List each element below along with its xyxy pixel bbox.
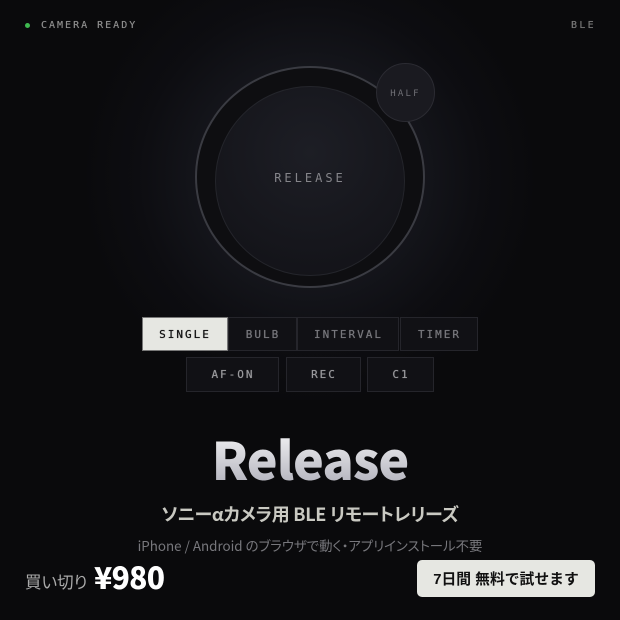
mode: REC: REC: [311, 368, 337, 381]
call to action button: [417, 560, 595, 597]
mode: TIMER: TIMER: [418, 328, 461, 340]
BLE label: BLE: [571, 20, 596, 31]
outer ring: [195, 66, 425, 288]
mode: BULB: BULB: [246, 328, 280, 340]
description: iPhone / Android のブラウザで動く・アプリインストール不要: [138, 535, 482, 555]
status text: CAMERA READY: [41, 20, 137, 31]
release dial: [195, 63, 435, 288]
call to action button: 7日間 無料で試せます: [433, 572, 579, 588]
mode: INTERVAL: [297, 317, 399, 351]
release label: RELEASE: [274, 171, 346, 185]
status indicator: camera ready: [25, 20, 137, 31]
mode: AF-ON: AF-ON: [211, 368, 255, 381]
mode: TIMER: [400, 317, 478, 351]
title: Release: [212, 420, 408, 495]
icon: green status dot: [25, 23, 30, 28]
price value: ¥980: [94, 554, 164, 598]
half press button: [376, 63, 435, 122]
price label: 買い切り: [25, 569, 87, 593]
mode: C1: [367, 357, 434, 392]
subtitle: ソニーαカメラ用 BLE リモートレリーズ: [161, 501, 459, 527]
mode: SINGLE (active): SINGLE: [159, 328, 211, 340]
mode: C1: C1: [392, 368, 410, 381]
mode: REC: [286, 357, 361, 392]
mode buttons: [142, 317, 478, 392]
price: [25, 554, 164, 598]
mode: INTERVAL: INTERVAL: [314, 328, 383, 340]
mode: SINGLE (active): [142, 317, 228, 351]
mode: AF-ON: [186, 357, 279, 392]
mode: BULB: [228, 317, 297, 351]
inner release button: [215, 86, 405, 276]
half press button: HALF: [390, 88, 421, 98]
